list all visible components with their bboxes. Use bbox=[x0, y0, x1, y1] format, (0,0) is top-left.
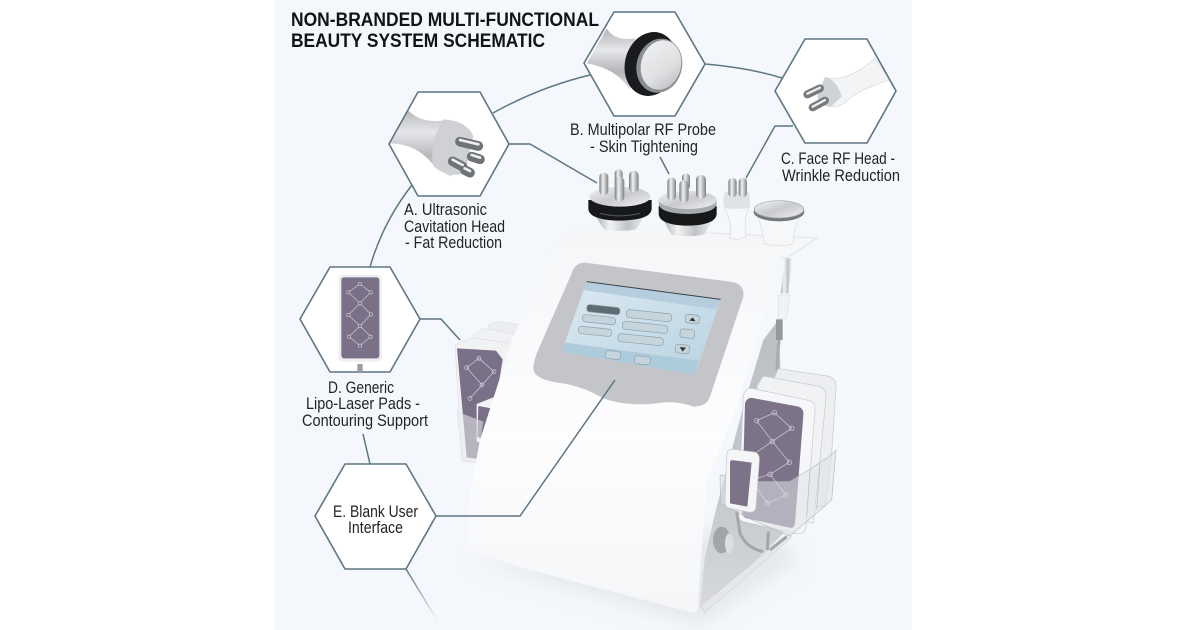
hexagon E: blank interface label bbox=[315, 464, 436, 569]
device floor shadow bbox=[470, 520, 800, 625]
hexagon E: blank interface label: Interface bbox=[348, 519, 403, 537]
head B on device bbox=[659, 173, 717, 236]
label B bbox=[570, 121, 716, 156]
device: left lipo pads bbox=[455, 322, 523, 463]
background panel bbox=[274, 0, 912, 630]
hexagon A: ultrasonic cavitation head bbox=[389, 92, 509, 196]
connector line: interface bbox=[436, 380, 615, 516]
screen buttons bbox=[578, 304, 700, 365]
grey bezel bbox=[533, 263, 743, 407]
head C on device bbox=[724, 178, 749, 239]
label C bbox=[781, 150, 900, 185]
label C: Wrinkle Reduction bbox=[782, 167, 900, 185]
title: BEAUTY SYSTEM SCHEMATIC bbox=[291, 31, 545, 52]
small pad bbox=[725, 449, 759, 512]
device: four treatment heads bbox=[588, 169, 804, 246]
hexagon E: blank interface label: E. Blank User bbox=[333, 503, 418, 521]
label B: B. Multipolar RF Probe bbox=[570, 121, 716, 139]
hexagon C: face RF head bbox=[775, 39, 896, 143]
label B: - Skin Tightening bbox=[590, 138, 698, 156]
device: shelf bbox=[580, 227, 817, 258]
label D: D. Generic bbox=[328, 379, 394, 397]
blank screen bbox=[562, 282, 721, 375]
device: main white body bbox=[468, 225, 783, 613]
device: right lipo pads in holder bbox=[713, 369, 836, 553]
label D: Lipo-Laser Pads - bbox=[306, 395, 420, 413]
device: rear side panel and cable bbox=[700, 258, 792, 613]
label A: - Fat Reduction bbox=[405, 234, 502, 252]
hexagon D: lipo-laser pad bbox=[300, 267, 420, 372]
head A on device bbox=[588, 169, 652, 231]
label A: Cavitation Head bbox=[404, 218, 505, 236]
label A: A. Ultrasonic bbox=[404, 201, 487, 219]
label D bbox=[302, 379, 428, 430]
label D: Contouring Support bbox=[302, 412, 428, 430]
title: NON-BRANDED MULTI-FUNCTIONAL bbox=[291, 10, 599, 31]
title bbox=[291, 10, 599, 52]
device: touchscreen console bbox=[533, 263, 743, 407]
label C: C. Face RF Head - bbox=[781, 150, 895, 168]
head D on device bbox=[754, 201, 804, 246]
clear pad holder bbox=[720, 450, 836, 536]
hexagon B: multipolar RF probe bbox=[584, 12, 705, 116]
connector lines bbox=[363, 64, 793, 620]
label A bbox=[404, 201, 505, 252]
